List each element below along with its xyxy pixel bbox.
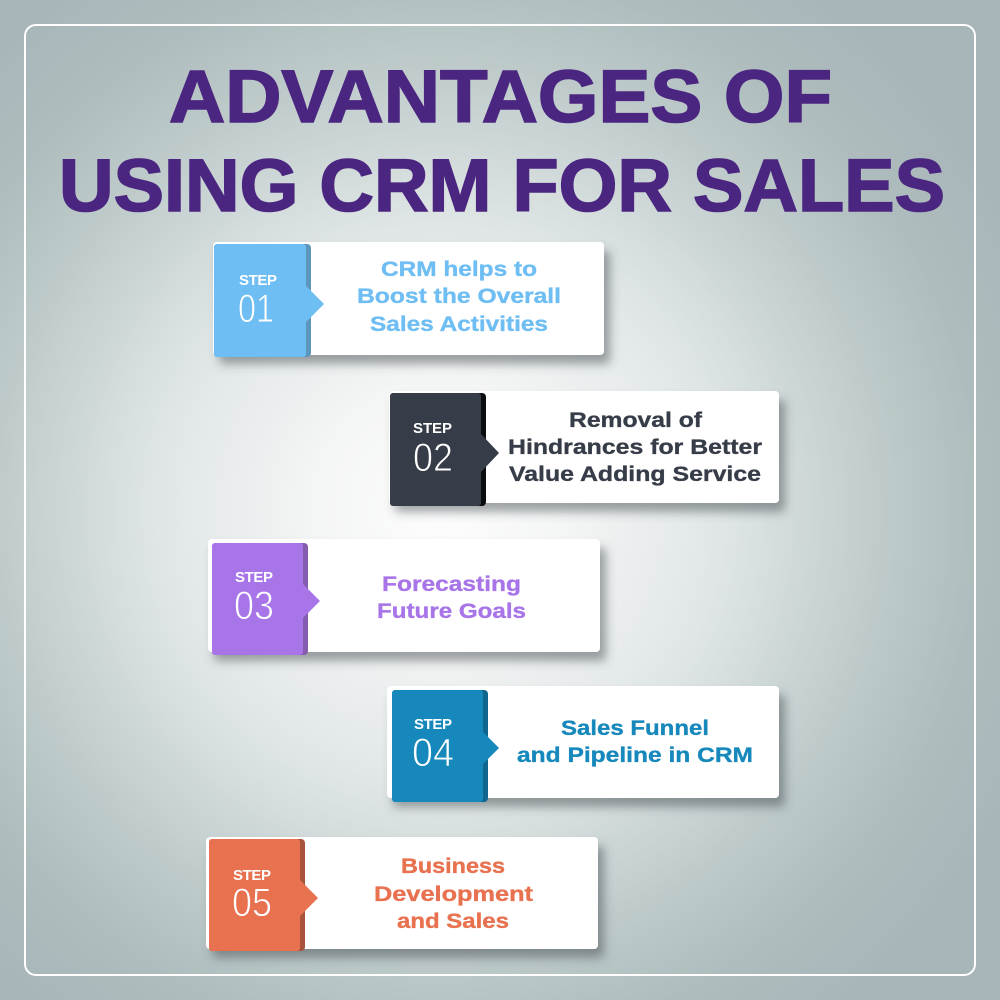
step badge 03: STEP <box>235 569 273 586</box>
card 05 <box>206 837 598 949</box>
step badge 03 <box>212 543 320 655</box>
text 02 <box>508 408 763 486</box>
text 05: and Sales <box>397 909 509 933</box>
step badge 05: STEP <box>233 867 271 884</box>
step badge 04 <box>392 690 499 802</box>
text 03 <box>377 572 526 623</box>
step badge 04: 04 <box>412 731 454 775</box>
card 01 <box>213 242 604 355</box>
text 01: CRM helps to <box>381 257 537 281</box>
text 01: Sales Activities <box>370 312 548 336</box>
step badge 03: 03 <box>234 584 274 628</box>
step badge 05 <box>209 839 318 951</box>
panel: step 05 <box>206 837 598 951</box>
step badge 01 <box>214 244 324 357</box>
title: ADVANTAGES OF <box>169 55 832 138</box>
card 02 <box>389 391 779 503</box>
step badge 02 <box>390 393 499 506</box>
panel: step 01 <box>213 242 604 357</box>
text 05: Development <box>374 882 533 906</box>
step badge 02: 02 <box>413 436 453 480</box>
title: USING CRM FOR SALES <box>59 144 945 227</box>
panel: step 03 <box>208 539 600 655</box>
text 04 <box>517 716 753 767</box>
panel: step 02 <box>389 391 779 506</box>
text 05: Business <box>401 854 505 878</box>
step badge 01: STEP <box>239 272 277 289</box>
text 03: Future Goals <box>377 599 526 623</box>
text 04: and Pipeline in CRM <box>517 743 753 767</box>
card 04 <box>387 686 779 798</box>
text 05 <box>374 854 533 933</box>
text 02: Removal of <box>569 408 703 432</box>
text 02: Hindrances for Better <box>508 435 763 459</box>
step badge 01: 01 <box>238 287 274 331</box>
panel: step 04 <box>387 686 779 802</box>
text 01: Boost the Overall <box>357 284 561 308</box>
title <box>59 55 945 227</box>
step badge 05: 05 <box>232 881 272 925</box>
text 04: Sales Funnel <box>561 716 709 740</box>
card 03 <box>208 539 600 652</box>
text 03: Forecasting <box>382 572 521 596</box>
step badge 04: STEP <box>414 716 452 733</box>
step badge 02: STEP <box>413 420 452 437</box>
text 02: Value Adding Service <box>509 462 761 486</box>
text 01 <box>357 257 561 336</box>
